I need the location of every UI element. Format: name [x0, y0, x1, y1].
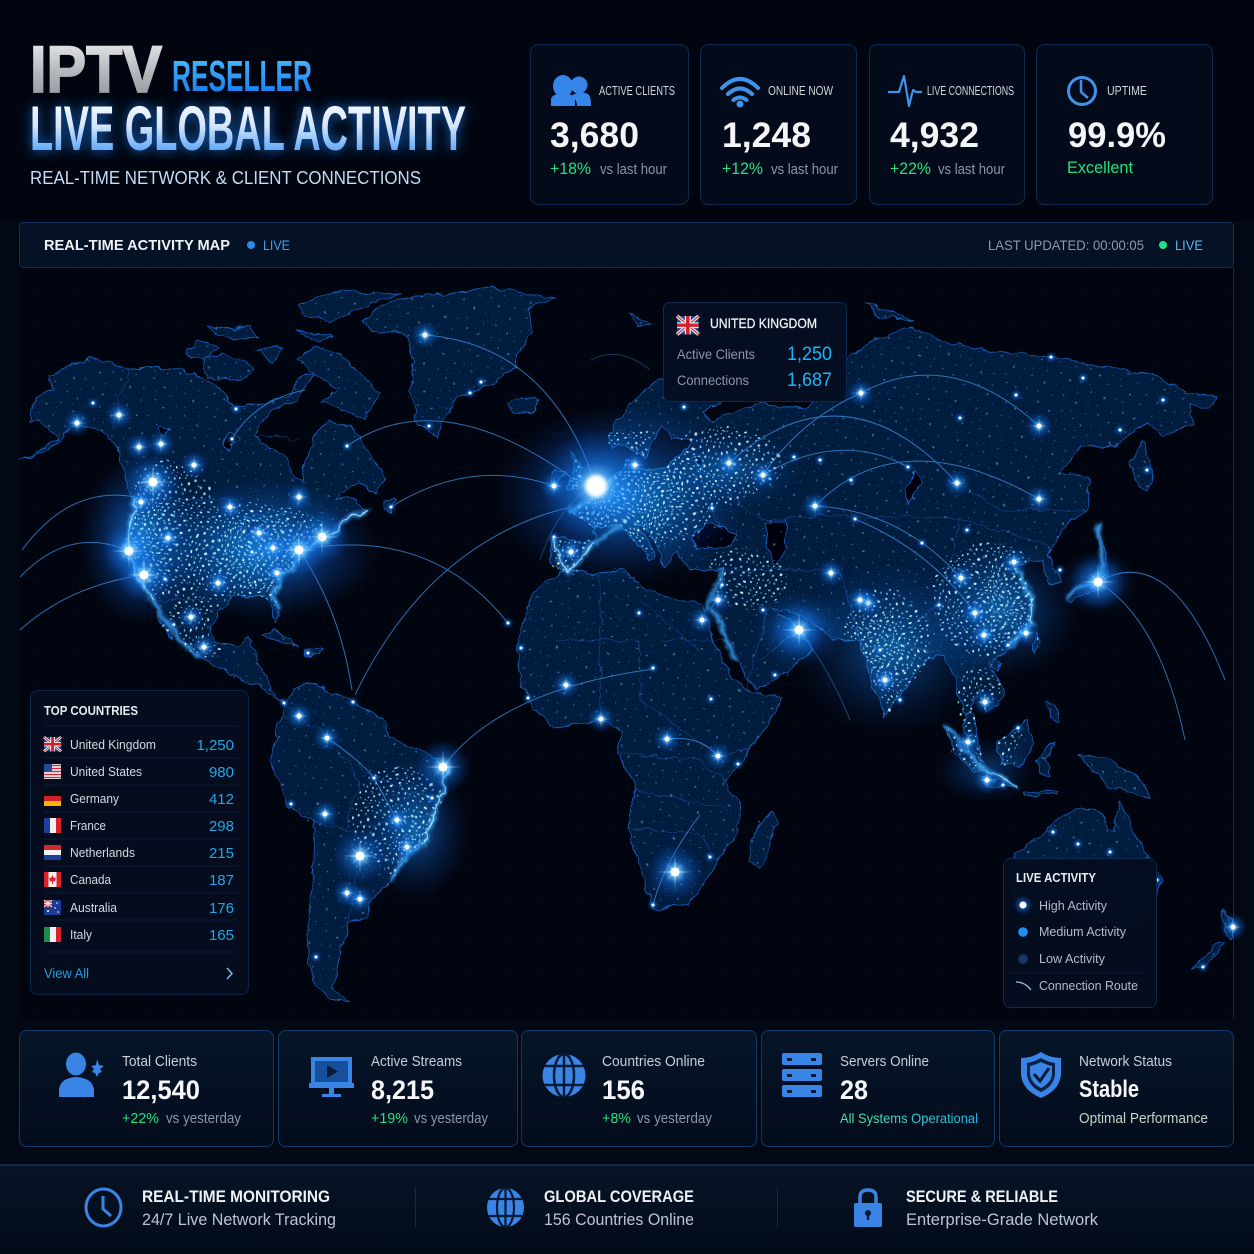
- row: France: France: [70, 818, 106, 833]
- row: Italy: 165: [209, 927, 234, 944]
- legend: live activity: [1004, 858, 1156, 1008]
- tooltip: United Kingdom: UNITED KINGDOM: [710, 315, 817, 331]
- row: France: [44, 818, 234, 835]
- map header bar: [20, 222, 1234, 268]
- metric card: network status: [1000, 1030, 1234, 1146]
- row: Italy: Italy: [70, 927, 92, 942]
- metric card: servers online: 28: [840, 1075, 868, 1105]
- icon: globe: [487, 1188, 524, 1227]
- city lights: [20, 287, 1237, 1000]
- icon: clock: [86, 1189, 121, 1226]
- footer: global coverage: [487, 1188, 694, 1229]
- stat card: active clients: vs last hour: [600, 162, 667, 178]
- row: France: 298: [209, 818, 234, 835]
- metric card: network status: Network Status: [1079, 1054, 1172, 1070]
- tooltip: United Kingdom: [664, 302, 846, 402]
- live status: [1159, 238, 1203, 253]
- footer: real-time monitoring: REAL-TIME MONITORING: [142, 1188, 330, 1206]
- map glow blobs: [80, 405, 1136, 900]
- stat card: uptime: [1036, 44, 1212, 204]
- live badge: [247, 238, 290, 253]
- icon: globe: [542, 1054, 586, 1097]
- panel: top countries: [30, 690, 248, 994]
- metric card: total clients: Total Clients: [122, 1054, 197, 1070]
- metric card: countries online: 156: [602, 1075, 645, 1105]
- heading: REAL-TIME ACTIVITY MAP: [44, 237, 230, 254]
- country borders: [112, 368, 1086, 920]
- icon: shield: [1021, 1052, 1061, 1098]
- subtitle: REAL-TIME NETWORK & CLIENT CONNECTIONS: [30, 168, 421, 188]
- tooltip: United Kingdom: Active Clients: [677, 346, 755, 362]
- metric card: active streams: +19%: [371, 1110, 408, 1127]
- metric card: active streams: [278, 1030, 518, 1146]
- stat card: active clients: 3,680: [550, 116, 639, 155]
- icon: users: [551, 75, 591, 106]
- metric card: network status: Stable: [1079, 1076, 1139, 1103]
- metric card: servers online: Servers Online: [840, 1054, 929, 1070]
- stat card: online now: 1,248: [722, 116, 811, 155]
- footer: global coverage: GLOBAL COVERAGE: [544, 1188, 694, 1206]
- metric card: total clients: 12,540: [122, 1075, 200, 1105]
- footer: real-time monitoring: 24/7 Live Network Tracking: [142, 1211, 336, 1229]
- row: United States: [44, 764, 234, 781]
- metric card: active streams: 8,215: [371, 1075, 434, 1105]
- row: United Kingdom: United Kingdom: [70, 737, 156, 752]
- city lights: regional: [120, 427, 1048, 875]
- icon: monitor: [309, 1057, 354, 1097]
- legend: low: Low Activity: [1039, 952, 1106, 966]
- footer: secure and reliable: [854, 1188, 1099, 1229]
- stat card: online now: ONLINE NOW: [768, 84, 833, 98]
- title: LIVE GLOBAL ACTIVITY: LIVE GLOBAL ACTIVITY: [30, 94, 466, 164]
- row: Germany: [44, 791, 234, 808]
- footer band: [0, 1165, 1254, 1254]
- title glow: LIVE GLOBAL ACTIVITY: [30, 94, 466, 164]
- row: Canada: Canada: [70, 872, 112, 887]
- stat card: online now: [700, 44, 856, 204]
- row: Germany: 412: [209, 791, 234, 808]
- stat card: uptime: 99.9%: [1068, 116, 1166, 155]
- metric card: countries online: +8%: [602, 1110, 631, 1127]
- row: United Kingdom: [44, 737, 234, 754]
- inland seas and lakes: [158, 425, 920, 567]
- row: United Kingdom: 1,250: [196, 737, 234, 754]
- row: Canada: 187: [209, 872, 234, 889]
- metric card: servers online: All Systems Operational: [840, 1110, 978, 1126]
- tooltip: United Kingdom: 1,250: [787, 344, 832, 365]
- row: Australia: 176: [209, 900, 234, 917]
- metric card: active streams: vs yesterday: [414, 1111, 489, 1127]
- bright coasts: [127, 478, 1102, 880]
- stat card: active clients: ACTIVE CLIENTS: [599, 84, 675, 98]
- footer: secure and reliable: SECURE & RELIABLE: [906, 1188, 1058, 1206]
- row: Netherlands: 215: [209, 845, 234, 862]
- stat card: online now: +12%: [722, 159, 763, 178]
- stat card: uptime: Excellent: [1067, 158, 1133, 177]
- stat card: active clients: [530, 44, 688, 204]
- legend: high: [1013, 895, 1108, 915]
- icon: servers: [782, 1053, 822, 1097]
- metric card: countries online: Countries Online: [602, 1054, 705, 1070]
- legend: high: High Activity: [1039, 899, 1108, 913]
- view all link: [44, 965, 232, 981]
- footer: secure and reliable: Enterprise-Grade Network: [906, 1211, 1099, 1229]
- row: Netherlands: Netherlands: [70, 845, 135, 860]
- row: Australia: [44, 900, 234, 917]
- tooltip: United Kingdom: 1,687: [787, 370, 832, 391]
- icon: clock: [1068, 78, 1096, 104]
- city lights: dense cores: [125, 447, 1035, 865]
- connection routes: [20, 335, 1225, 905]
- metric card: total clients: [20, 1030, 274, 1146]
- metric card: countries online: [522, 1030, 756, 1146]
- row: United States: United States: [70, 764, 142, 779]
- last updated: LAST UPDATED: 00:00:05: [988, 237, 1144, 253]
- metric card: servers online: [762, 1030, 994, 1146]
- stat card: live connections: LIVE CONNECTIONS: [927, 84, 1014, 98]
- title block: [30, 32, 466, 188]
- hub: Europe: [538, 428, 654, 544]
- footer: global coverage: 156 Countries Online: [544, 1211, 694, 1229]
- activity hotspots: [63, 321, 1247, 973]
- icon: lock: [854, 1190, 882, 1227]
- stat card: live connections: vs last hour: [938, 162, 1005, 178]
- legend: live activity: LIVE ACTIVITY: [1016, 870, 1096, 885]
- live badge: LIVE: [263, 238, 290, 253]
- row: Netherlands: [44, 845, 234, 862]
- world landmasses: [20, 287, 1237, 1000]
- icon: user add: [59, 1052, 104, 1097]
- row: Germany: Germany: [70, 791, 119, 806]
- row: Canada: [44, 872, 234, 889]
- title: RESELLER: RESELLER: [172, 52, 312, 101]
- footer: real-time monitoring: [86, 1188, 336, 1229]
- icon: wifi: [722, 79, 758, 106]
- stat card: live connections: +22%: [890, 159, 931, 178]
- legend: medium: Medium Activity: [1039, 925, 1127, 939]
- row: United States: 980: [209, 764, 234, 781]
- title: IPTV: IPTV: [30, 32, 162, 106]
- view all link: View All: [44, 965, 89, 981]
- stat card: live connections: 4,932: [890, 116, 979, 155]
- map panel: [20, 267, 1247, 1019]
- live status: LIVE: [1175, 238, 1203, 253]
- metric card: active streams: Active Streams: [371, 1054, 462, 1070]
- metric card: total clients: +22%: [122, 1110, 159, 1127]
- legend: route: Connection Route: [1039, 979, 1138, 993]
- metric card: countries online: vs yesterday: [637, 1111, 713, 1127]
- icon: pulse: [888, 76, 922, 106]
- metric card: total clients: vs yesterday: [166, 1111, 242, 1127]
- stat card: online now: vs last hour: [771, 162, 838, 178]
- row: Italy: [44, 927, 234, 944]
- tooltip: United Kingdom: Connections: [677, 372, 749, 388]
- flag: UK: [677, 316, 699, 334]
- metric card: network status: Optimal Performance: [1079, 1111, 1208, 1127]
- stat card: uptime: UPTIME: [1107, 84, 1147, 98]
- city lights: sparse: [20, 287, 1237, 1000]
- stat card: active clients: +18%: [550, 159, 591, 178]
- row: Australia: Australia: [70, 900, 118, 915]
- panel: top countries: TOP COUNTRIES: [44, 703, 138, 718]
- stat card: live connections: [870, 44, 1024, 204]
